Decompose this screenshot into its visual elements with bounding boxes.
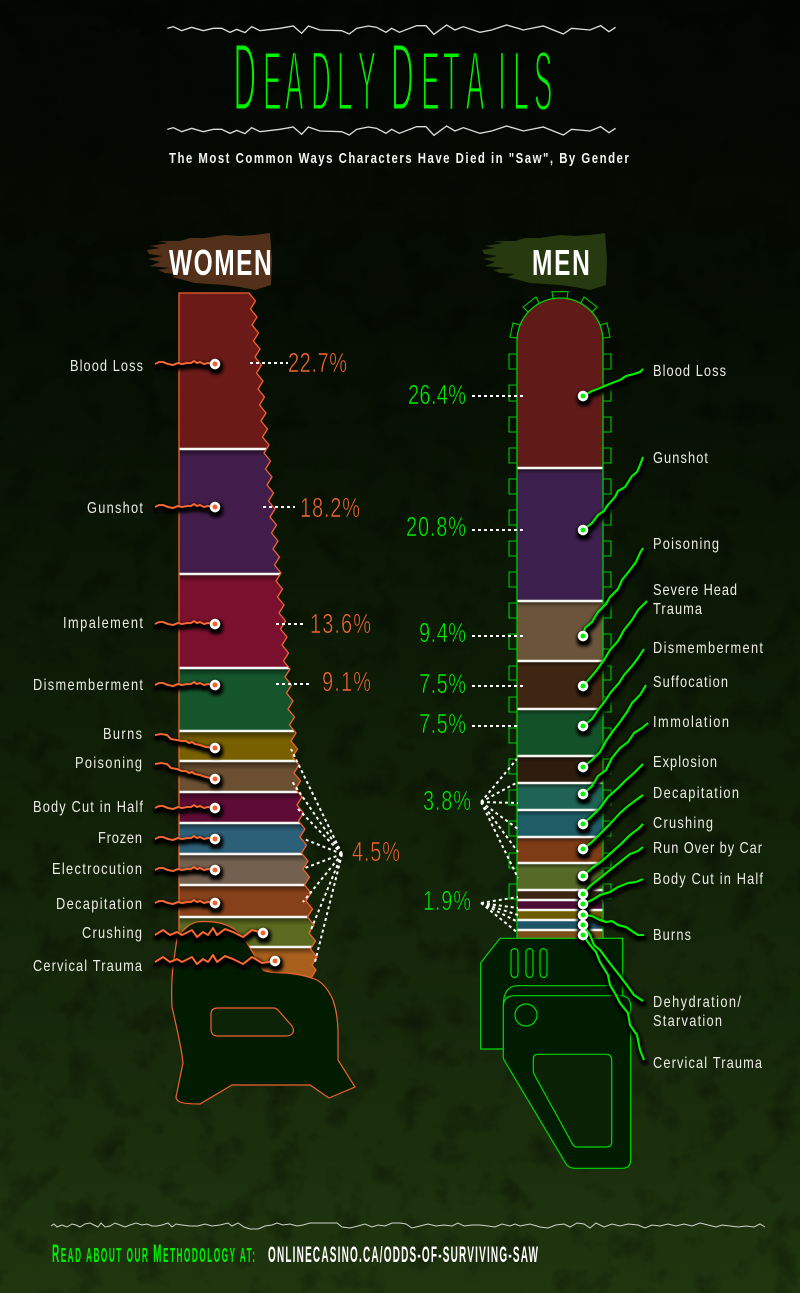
heading: women <box>147 233 272 290</box>
percentages: men: 3.8% <box>423 786 471 817</box>
labels: women: Gunshot <box>87 500 143 517</box>
footer: methodology line: READ ABOUT OUR METHODOLOGY AT: <box>52 1241 255 1269</box>
percentages: women: 18.2% <box>300 493 360 524</box>
chainsaw blade: men <box>517 298 603 938</box>
saw handle: women <box>172 922 355 1104</box>
labels: men: Suffocation <box>653 674 728 691</box>
title: D <box>391 24 414 132</box>
title: ETAILS <box>421 35 552 129</box>
percentages: women: 22.7% <box>288 348 347 379</box>
percentages: men: 20.8% <box>406 512 466 543</box>
panel: women <box>33 233 400 1104</box>
labels: men: Burns <box>653 927 691 944</box>
percentages: men: 9.4% <box>419 618 466 649</box>
labels: men: Dehydration/ <box>653 994 742 1011</box>
labels: men: Explosion <box>653 754 717 771</box>
chainsaw body: men <box>481 938 631 1168</box>
title: EADLY <box>263 35 376 129</box>
subtitle: The Most Common Ways Characters Have Died in "Saw", By Gender <box>169 149 629 166</box>
top wavy rule <box>167 25 616 34</box>
labels: men <box>653 363 764 1072</box>
percentage dashes: men <box>472 396 523 933</box>
labels: women: Frozen <box>98 830 142 847</box>
percentages: women: 13.6% <box>310 609 371 640</box>
percentages: men: 26.4% <box>408 380 466 411</box>
percentages: men: 7.5% <box>419 709 466 740</box>
lower wavy rule <box>167 126 616 135</box>
labels: men: Body Cut in Half <box>653 871 764 888</box>
footer wavy rule <box>51 1223 765 1229</box>
labels: men: Run Over by Car <box>653 840 762 857</box>
footer: url: ONLINECASINO.CA/ODDS-OF-SURVIVING-SAW <box>268 1243 538 1267</box>
leader lines: women <box>155 359 280 966</box>
labels: men: Cervical Trauma <box>653 1055 763 1072</box>
labels: women: Crushing <box>82 925 142 942</box>
labels: women: Impalement <box>63 615 143 632</box>
heading: men <box>482 233 607 290</box>
percentages: men: 7.5% <box>419 669 466 700</box>
labels: women: Burns <box>103 726 142 743</box>
labels: men: Crushing <box>653 815 713 832</box>
labels: men: Immolation <box>653 714 729 731</box>
labels: women <box>33 358 144 975</box>
labels: women: Poisoning <box>75 755 142 772</box>
heading: men: MEN <box>532 242 590 283</box>
labels: men: Blood Loss <box>653 363 726 380</box>
percentage dashes: women <box>250 363 342 962</box>
labels: women: Blood Loss <box>70 358 143 375</box>
labels: women: Body Cut in Half <box>33 799 144 816</box>
labels: women: Dismemberment <box>33 677 143 694</box>
labels: men: Starvation <box>653 1013 722 1030</box>
labels: women: Cervical Trauma <box>33 958 143 975</box>
labels: men: Dismemberment <box>653 640 763 657</box>
leader lines: men <box>578 369 648 1060</box>
labels: men: Trauma <box>653 601 703 618</box>
percentages: men: 1.9% <box>423 886 471 917</box>
title: D <box>233 24 256 132</box>
labels: men: Gunshot <box>653 450 708 467</box>
saw blade: women <box>179 293 320 980</box>
percentages: women: 4.5% <box>352 837 400 868</box>
percentages: women <box>288 348 400 868</box>
labels: men: Poisoning <box>653 536 719 553</box>
panel: men <box>406 233 764 1168</box>
heading: women: WOMEN <box>169 242 272 283</box>
labels: men: Decapitation <box>653 785 739 802</box>
percentages: men <box>406 380 471 917</box>
percentages: women: 9.1% <box>322 667 371 698</box>
chainsaw teeth: men <box>509 292 611 899</box>
labels: women: Electrocution <box>52 861 142 878</box>
labels: women: Decapitation <box>56 896 142 913</box>
labels: men: Severe Head <box>653 582 737 599</box>
